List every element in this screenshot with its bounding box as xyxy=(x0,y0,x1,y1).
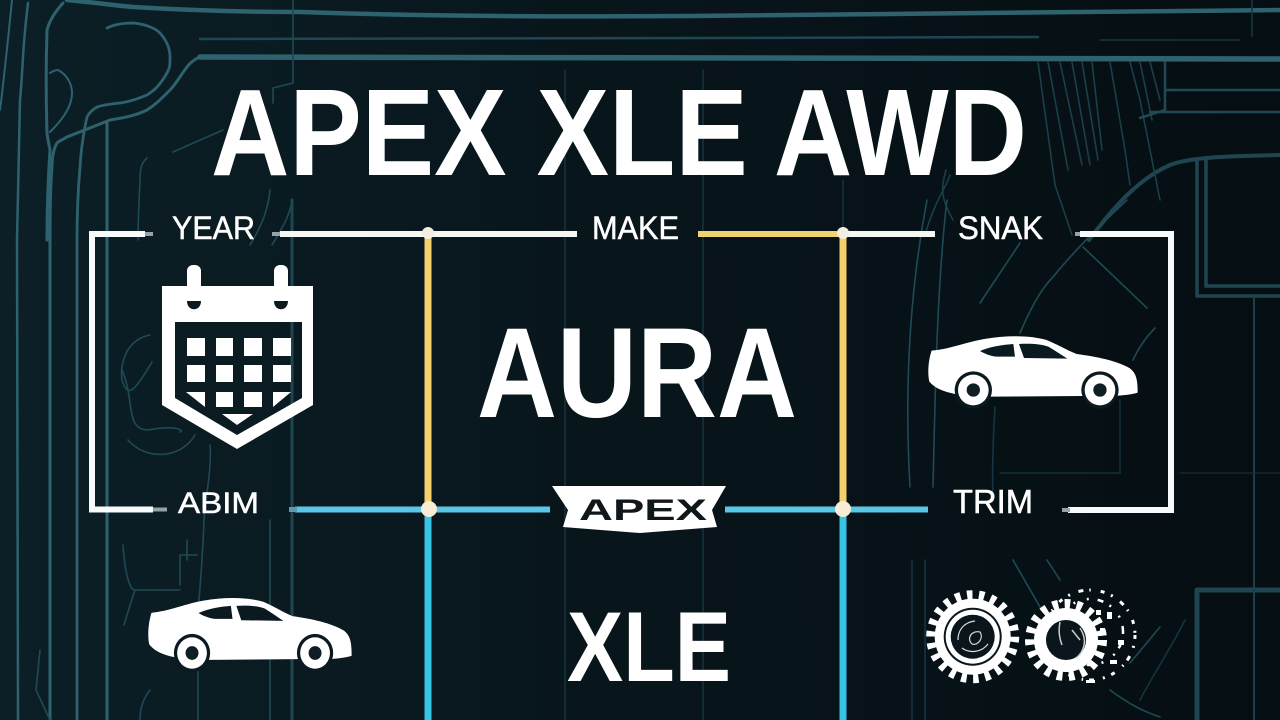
icon: calendar shield xyxy=(162,265,313,449)
big text: aura: AURA xyxy=(477,302,797,445)
big text: xle: XLE xyxy=(567,591,731,702)
label: abim: ABIM xyxy=(178,487,259,520)
label: snak: SNAK xyxy=(958,210,1043,246)
icon: car, right xyxy=(928,336,1138,409)
logo banner: apex xyxy=(552,486,726,533)
gear: solid xyxy=(931,595,1014,678)
icon: gears xyxy=(931,590,1135,683)
gear: dissolving xyxy=(1030,590,1135,683)
icon: car, left xyxy=(148,598,352,672)
label: year: YEAR xyxy=(172,210,255,246)
title: APEX XLE AWD xyxy=(211,65,1027,202)
connector grid xyxy=(92,227,1171,720)
logo banner: apex: APEX xyxy=(579,494,707,527)
label: trim: TRIM xyxy=(953,483,1033,520)
label: make: MAKE xyxy=(592,210,679,246)
